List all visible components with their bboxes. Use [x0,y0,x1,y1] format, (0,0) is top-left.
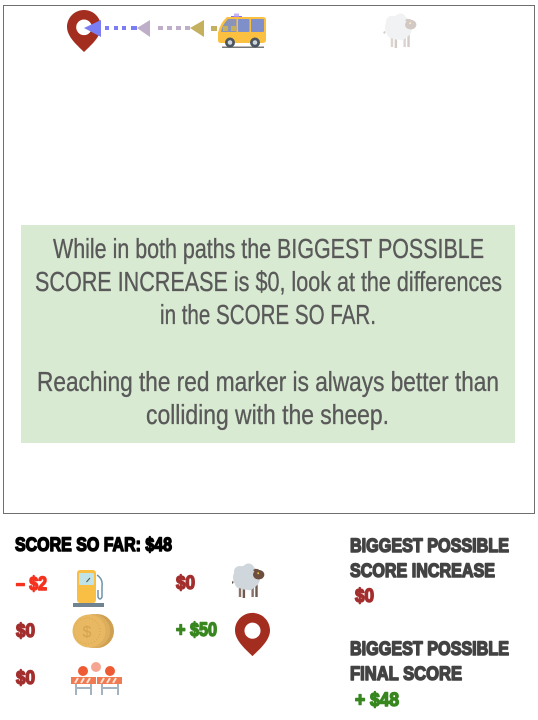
score: coins value: $0 [16,621,35,642]
score: sheep value: $0 [176,573,195,594]
icon: stack of coins [72,614,114,648]
value: biggest possible score increase: $0 [355,586,374,607]
heading: biggest possible final score: FINAL SCORE [350,664,462,685]
panel: explanation callout: in the SCORE SO FAR. [160,299,376,330]
icon: stack of coins: $ [83,624,92,641]
arrow: gold dotted path segment [190,20,217,37]
heading: biggest possible final score: BIGGEST POSSIBLE [350,639,509,660]
icon: fuel pump [73,570,104,607]
icon: red location marker target [67,10,101,52]
icon: red location marker [235,613,270,656]
heading: biggest possible score increase: SCORE INCREASE [350,561,495,582]
arrow: mauve dotted path segment [137,20,190,37]
value: biggest possible final score: + $48 [355,690,399,711]
panel: explanation callout [21,225,515,443]
score: marker reward: + $50 [176,620,217,641]
score: roadblock value: $0 [16,668,35,689]
arrow: blue dotted path to marker [84,20,137,37]
panel: explanation callout: colliding with the sheep. [146,399,389,430]
icon: sheep [232,564,264,598]
icon: road barriers [71,662,122,695]
heading: biggest possible score increase: BIGGEST POSSIBLE [350,536,509,557]
panel: game area frame [4,6,534,514]
heading: score so far: SCORE SO FAR: $48 [15,535,172,556]
score: fuel penalty: – $2 [16,574,47,595]
icon: yellow van [218,14,266,48]
heading: biggest possible score increase [350,536,509,582]
icon: faded sheep on the road [384,13,416,48]
heading: biggest possible final score [350,639,509,685]
